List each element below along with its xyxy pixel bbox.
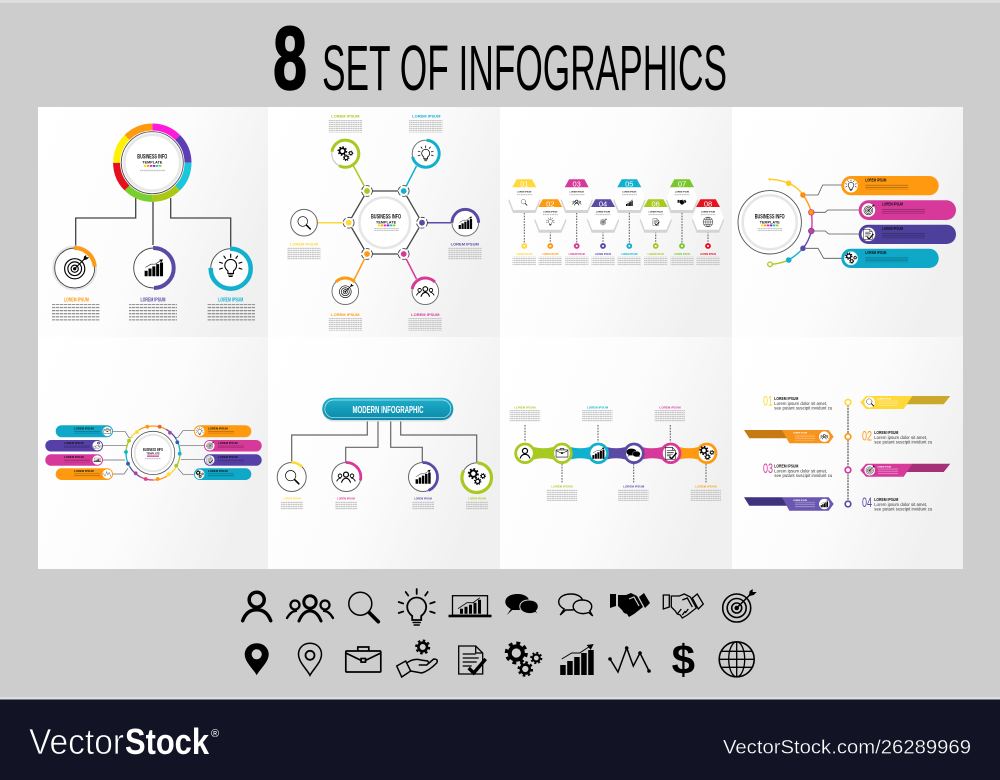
hub text: BUSINESS INFO bbox=[371, 214, 401, 220]
pill orange bbox=[841, 176, 939, 195]
right pills: LOREM IPSUM bbox=[208, 426, 228, 430]
hub text: TEMPLATE bbox=[146, 452, 160, 456]
step 04 bbox=[587, 199, 619, 265]
satellite chart bbox=[452, 209, 479, 236]
row 02: LOREM IPSUM bbox=[793, 432, 807, 434]
captions: LOREM IPSUM bbox=[290, 242, 319, 246]
hub circle bbox=[738, 191, 801, 254]
title bbox=[273, 9, 727, 109]
left pills: LOREM IPSUM bbox=[64, 441, 84, 445]
row 01: see putant suscipit invidunt cu bbox=[774, 406, 833, 410]
step 02: LOREM IPSUM bbox=[542, 254, 558, 256]
right pills: LOREM IPSUM bbox=[218, 455, 238, 459]
step 06: 06 bbox=[652, 199, 660, 208]
right pills: LOREM IPSUM bbox=[208, 469, 228, 473]
icon: map pin outline bbox=[298, 643, 322, 675]
row 01 bbox=[763, 392, 950, 410]
row 02: LOREM IPSUM bbox=[874, 430, 898, 435]
image id: VectorStock.com/26289969 bbox=[723, 736, 971, 758]
row 03 bbox=[763, 460, 950, 478]
label orange: LOREM IPSUM bbox=[64, 298, 89, 304]
captions: LOREM IPSUM bbox=[331, 312, 360, 317]
pill purple bbox=[859, 225, 956, 244]
satellite target bbox=[326, 272, 364, 310]
icon: group bbox=[287, 596, 333, 621]
captions: LOREM IPSUM bbox=[587, 406, 609, 410]
panel 2: hexagon hub bbox=[287, 114, 482, 331]
icon: light bulb bbox=[399, 589, 435, 625]
step 07 bbox=[666, 179, 698, 265]
label purple bbox=[129, 298, 177, 320]
pill cyan bbox=[841, 249, 939, 268]
row 01: LOREM IPSUM bbox=[774, 396, 798, 401]
label cyan: LOREM IPSUM bbox=[218, 298, 243, 304]
captions: LOREM IPSUM bbox=[411, 312, 440, 317]
row 03: Lorem ipsum dolor sit amet, bbox=[774, 468, 827, 474]
icon: magnifier bbox=[349, 592, 378, 622]
logo: Vector bbox=[29, 721, 124, 762]
icon: handshake filled bbox=[610, 593, 650, 617]
icon: bar chart bbox=[560, 644, 594, 675]
step 02: 02 bbox=[546, 199, 554, 208]
step 03: LOREM IPSUM bbox=[569, 254, 585, 256]
panel 5: dotted ring with eight pills bbox=[45, 416, 262, 490]
node dots bbox=[343, 186, 427, 259]
captions: LOREM IPSUM bbox=[414, 497, 432, 500]
hub circle: TEMPLATE bbox=[760, 220, 780, 224]
panel 6: modern infographic tree bbox=[277, 398, 493, 510]
hub text: BUSINESS INFO bbox=[137, 154, 168, 160]
ring dots bbox=[124, 425, 182, 481]
step 05: LOREM IPSUM bbox=[622, 192, 637, 194]
row 04: LOREM IPSUM bbox=[793, 500, 807, 502]
step 03: LOREM IPSUM bbox=[570, 192, 584, 194]
step 01: 01 bbox=[520, 180, 528, 188]
icon: hand with gear bbox=[397, 641, 437, 677]
label cyan bbox=[207, 298, 255, 320]
spine dots bbox=[845, 400, 851, 507]
satellite magnifier bbox=[291, 209, 317, 236]
pill magenta bbox=[859, 200, 956, 220]
captions: LOREM IPSUM bbox=[468, 497, 486, 500]
hub text: TEMPLATE bbox=[376, 220, 397, 224]
step 04: LOREM IPSUM bbox=[596, 211, 610, 213]
step 04: LOREM IPSUM bbox=[595, 254, 611, 256]
footer bar bbox=[0, 700, 1000, 780]
nodes bbox=[516, 444, 716, 463]
step 02: LOREM IPSUM bbox=[543, 211, 558, 213]
captions bbox=[287, 114, 482, 331]
satellite gears bbox=[330, 138, 361, 169]
step 01 bbox=[508, 179, 540, 265]
row 01: 01 bbox=[763, 392, 773, 408]
step 07: 07 bbox=[678, 180, 686, 188]
dashed leaders bbox=[525, 425, 706, 483]
icon: chat outline bbox=[559, 594, 593, 616]
icon: briefcase bbox=[346, 647, 381, 672]
row 04 bbox=[744, 494, 933, 511]
target circle bbox=[53, 246, 96, 290]
hub text bbox=[137, 154, 168, 172]
panel grid background bbox=[38, 107, 963, 569]
row 01: Lorem ipsum dolor sit amet, bbox=[774, 401, 827, 406]
inner ring bbox=[359, 197, 410, 248]
step 08: 08 bbox=[704, 199, 712, 208]
right pills: LOREM IPSUM bbox=[218, 441, 238, 445]
hub text bbox=[143, 447, 163, 460]
step 03 bbox=[561, 179, 593, 265]
icon: dollar: $ bbox=[672, 636, 695, 683]
icon: globe bbox=[719, 642, 754, 677]
captions: LOREM IPSUM bbox=[551, 484, 573, 488]
step 08 bbox=[692, 199, 724, 265]
connector lines bbox=[76, 198, 231, 247]
row 04: see putant suscipit invidunt cu bbox=[874, 506, 933, 511]
row 04: 04 bbox=[862, 494, 872, 510]
pill magenta: LOREM IPSUM bbox=[882, 202, 903, 207]
icon: map pin filled bbox=[245, 643, 269, 675]
chart circle bbox=[408, 462, 438, 492]
panel 4: arc with four pills bbox=[738, 176, 956, 268]
linking bands bbox=[525, 444, 707, 462]
icon: gears bbox=[506, 643, 542, 676]
row 03: LOREM IPSUM bbox=[774, 463, 798, 468]
banner: MODERN INFOGRAPHIC bbox=[352, 405, 424, 416]
right pills bbox=[194, 425, 262, 480]
icon: target bbox=[723, 589, 757, 622]
captions: LOREM IPSUM bbox=[451, 242, 479, 246]
captions bbox=[510, 406, 721, 501]
row 03: see putant suscipit invidunt cu bbox=[774, 473, 833, 478]
step 02 bbox=[534, 199, 566, 265]
captions: LOREM IPSUM bbox=[283, 497, 301, 500]
left pills: LOREM IPSUM bbox=[74, 469, 94, 473]
captions: LOREM IPSUM bbox=[623, 484, 645, 488]
step 03: 03 bbox=[573, 180, 581, 188]
step 07: LOREM IPSUM bbox=[674, 254, 690, 256]
label orange bbox=[52, 298, 100, 320]
satellite bulb bbox=[411, 139, 440, 168]
spokes bbox=[316, 166, 451, 280]
left pills: LOREM IPSUM bbox=[74, 426, 94, 430]
step 06: LOREM IPSUM bbox=[648, 254, 664, 256]
hexagon bbox=[349, 191, 422, 254]
spine bbox=[847, 402, 849, 504]
footer strip bbox=[0, 697, 1000, 700]
row 03: 03 bbox=[763, 460, 773, 476]
connectors bbox=[103, 431, 204, 474]
step 01: LOREM IPSUM bbox=[517, 192, 532, 194]
ring bbox=[116, 416, 190, 490]
captions bbox=[281, 497, 488, 510]
step 06 bbox=[640, 199, 672, 265]
pill cyan: LOREM IPSUM bbox=[865, 250, 886, 255]
label purple: LOREM IPSUM bbox=[140, 298, 166, 304]
hub ring bbox=[102, 112, 203, 213]
row 03: LOREM IPSUM bbox=[877, 466, 891, 468]
hub circle: BUSINESS INFO bbox=[755, 214, 785, 220]
row 02: 02 bbox=[862, 428, 872, 444]
chart circle bbox=[134, 248, 174, 288]
icon: laptop chart bbox=[448, 596, 492, 617]
step 08: LOREM IPSUM bbox=[700, 254, 716, 256]
arc dots bbox=[768, 178, 814, 267]
hub text: TEMPLATE bbox=[142, 160, 163, 164]
arc bbox=[770, 179, 812, 264]
row 01: LOREM IPSUM bbox=[877, 398, 891, 400]
captions: LOREM IPSUM bbox=[412, 114, 441, 118]
logo bbox=[29, 721, 219, 762]
step 05: 05 bbox=[625, 180, 633, 188]
top strip bbox=[0, 0, 1000, 3]
icon: handshake outline bbox=[663, 594, 703, 618]
captions: LOREM IPSUM bbox=[331, 114, 360, 118]
icon: zigzag line bbox=[608, 646, 651, 673]
step 05 bbox=[613, 179, 646, 265]
step 08: LOREM IPSUM bbox=[701, 211, 715, 213]
left pills bbox=[45, 425, 113, 480]
row 02 bbox=[744, 428, 933, 444]
captions: LOREM IPSUM bbox=[337, 497, 355, 500]
step 07: LOREM IPSUM bbox=[675, 192, 689, 194]
satellite group bbox=[410, 276, 441, 307]
icon set bbox=[243, 589, 757, 683]
row 04: Lorem ipsum dolor sit amet, bbox=[874, 502, 927, 507]
left pills: LOREM IPSUM bbox=[64, 455, 84, 459]
title: 8 bbox=[273, 9, 307, 109]
row 02: see putant suscipit invidunt cu bbox=[874, 440, 933, 444]
connectors bbox=[292, 420, 477, 462]
hub text bbox=[371, 214, 401, 231]
search circle bbox=[277, 462, 306, 492]
panel 8: vertical timeline with arrow banners bbox=[744, 392, 950, 511]
pill purple: LOREM IPSUM bbox=[882, 226, 903, 231]
bulb circle bbox=[211, 249, 251, 289]
banner bbox=[322, 398, 453, 422]
group circle bbox=[332, 462, 361, 492]
captions: LOREM IPSUM bbox=[695, 484, 717, 488]
logo: Stock bbox=[125, 721, 210, 762]
panel 7: linked node timeline bbox=[510, 406, 721, 501]
step 01: LOREM IPSUM bbox=[516, 254, 532, 256]
icon: document check bbox=[459, 646, 486, 674]
panel 1: ring hub with three circles bbox=[52, 112, 255, 320]
row 04: LOREM IPSUM bbox=[874, 497, 898, 502]
hub text: BUSINESS INFO bbox=[143, 447, 163, 452]
captions: LOREM IPSUM bbox=[659, 406, 681, 410]
logo: ® bbox=[211, 728, 219, 740]
panel 3: eight numbered hexagon timeline bbox=[508, 179, 724, 265]
gears circle bbox=[461, 462, 493, 494]
row 02: Lorem ipsum dolor sit amet, bbox=[874, 435, 927, 440]
step 04: 04 bbox=[599, 199, 607, 208]
icon: chat filled bbox=[505, 594, 539, 616]
connectors bbox=[806, 185, 860, 258]
captions: LOREM IPSUM bbox=[514, 406, 536, 410]
step 05: LOREM IPSUM bbox=[621, 254, 637, 256]
icon: person bbox=[243, 592, 271, 621]
pill orange: LOREM IPSUM bbox=[865, 178, 886, 182]
step 06: LOREM IPSUM bbox=[649, 211, 663, 213]
